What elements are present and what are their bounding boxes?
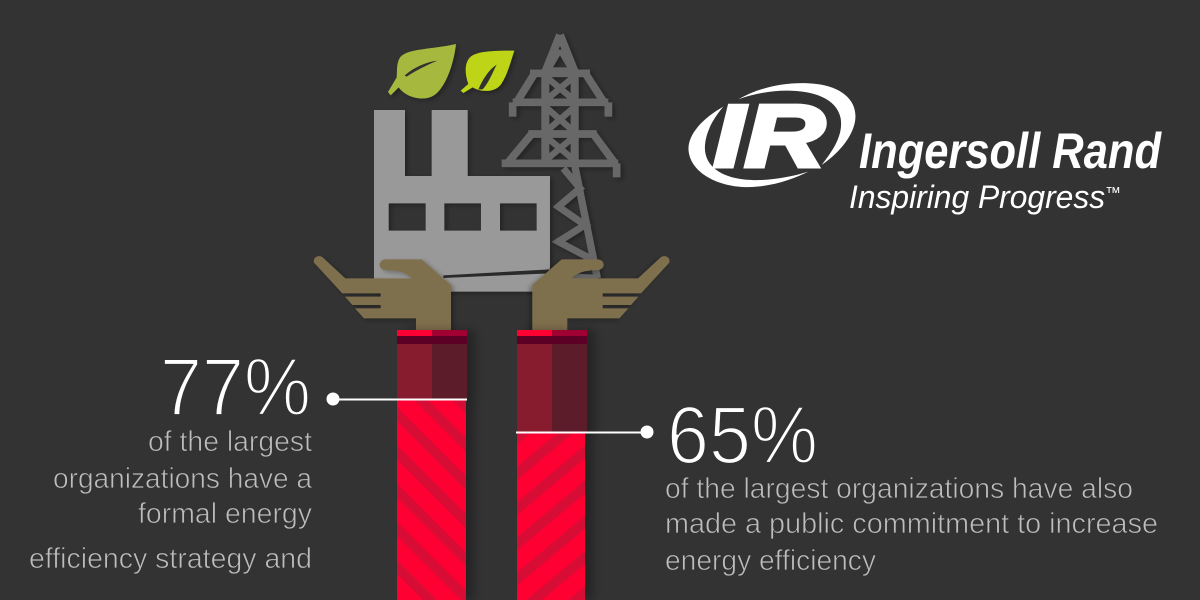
logo: Ingersoll Rand — [688, 83, 1162, 215]
logo tagline: Inspiring Progress — [849, 179, 1107, 215]
logo tagline: ™ — [1105, 185, 1121, 202]
callout line: 65% — [516, 426, 654, 438]
text: right description: energy efficiency — [665, 545, 877, 577]
icon: factory — [374, 110, 550, 292]
text: right description: of the largest organizations have also — [665, 473, 1133, 505]
illustration: factory, tower, leaves and hands — [314, 35, 670, 330]
logo emblem — [688, 83, 855, 187]
text: left description: formal energy — [138, 498, 313, 530]
logo emblem: IR — [713, 87, 825, 186]
right sleeve — [517, 330, 587, 600]
text: left description: of the largest — [148, 426, 312, 458]
text: right description: made a public commitment to increase — [665, 508, 1158, 540]
text: left description: efficiency strategy and — [29, 543, 312, 575]
logo wordmark: Ingersoll Rand — [859, 123, 1162, 179]
icon: green leaf small — [461, 51, 514, 93]
stat: 65%: 65% — [667, 390, 818, 481]
icon: green leaf large — [388, 44, 456, 98]
icon: right hand — [532, 256, 670, 330]
icon: transmission tower — [502, 35, 618, 278]
text: right description — [665, 473, 1158, 577]
text: left description: organizations have a — [53, 463, 312, 495]
left sleeve — [397, 330, 467, 600]
icon: left hand — [314, 256, 451, 330]
stat: 77%: 77% — [160, 342, 311, 433]
callout line: 77% — [326, 392, 467, 406]
text: left description — [29, 426, 313, 575]
